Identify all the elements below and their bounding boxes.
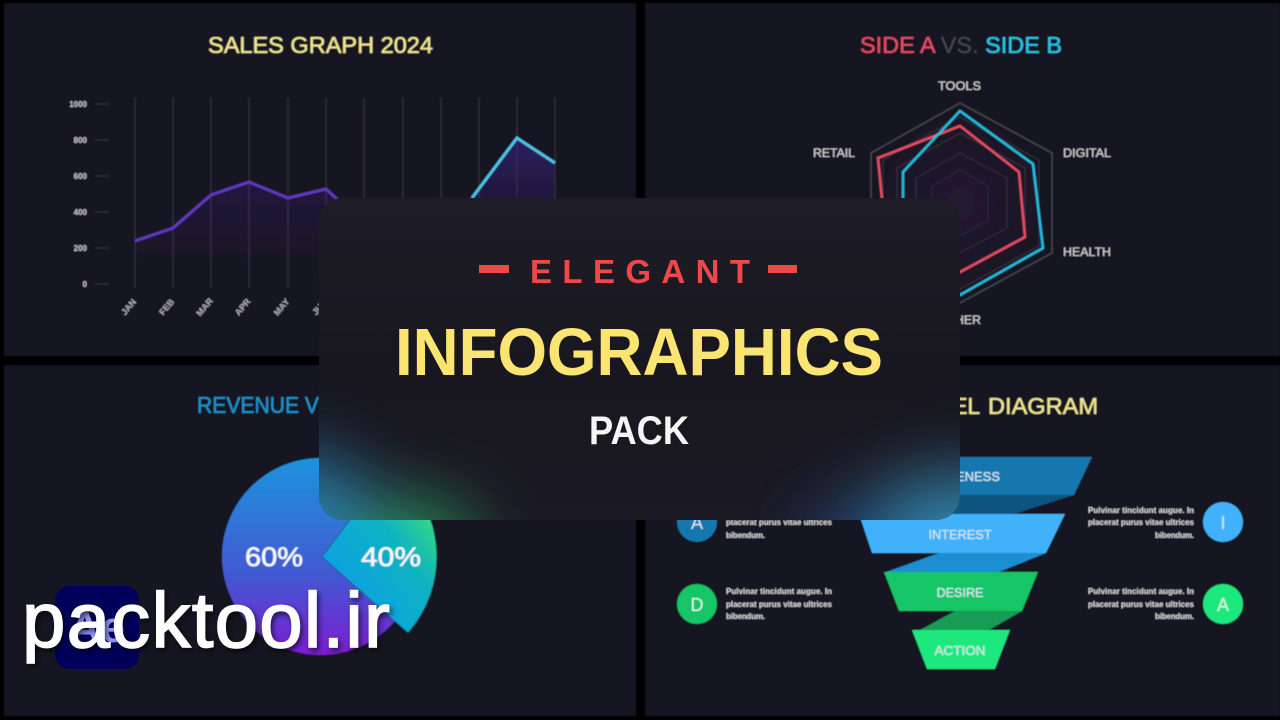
callout: D: placerat purus vitae ultrices	[726, 600, 833, 609]
line chart: FEB	[157, 297, 177, 317]
callout: D: D	[690, 595, 704, 615]
line chart: JAN	[119, 297, 138, 317]
callout: I: I	[1220, 513, 1226, 533]
heading: funnel diagram: FUNNEL	[890, 393, 980, 419]
icon: after effects badge: Ae	[69, 603, 125, 652]
callout: I	[1088, 502, 1243, 542]
line chart: JUN	[310, 297, 329, 317]
heading: revenue: REVENUE V	[197, 392, 320, 418]
line chart: 400	[74, 208, 88, 217]
pie chart	[222, 458, 437, 655]
line chart: APR	[233, 296, 253, 318]
radar chart: TOOLS	[938, 79, 981, 93]
panel: side a vs side b	[645, 3, 1280, 356]
icon: after effects badge	[55, 586, 139, 669]
line chart: 600	[74, 172, 88, 181]
callout: I: placerat purus vitae ultrices	[1088, 518, 1195, 527]
callout: I: bibendum.	[1155, 531, 1194, 540]
watermark: packtool.ir: packtool.ir	[22, 576, 390, 664]
radar chart: DIGITAL	[1063, 146, 1111, 160]
callout: D	[677, 584, 833, 624]
funnel: AWARENESS	[918, 469, 1000, 484]
callout: A left: A	[691, 513, 703, 533]
callout: A right: placerat purus vitae ultrices	[1088, 600, 1195, 609]
line chart: 0	[83, 280, 88, 289]
pie chart: 60%	[245, 542, 303, 572]
radar chart	[813, 79, 1111, 327]
pie chart: 40%	[361, 542, 421, 572]
title: infographics: INFOGRAPHICS	[395, 315, 883, 390]
callout: A left	[677, 502, 833, 542]
funnel: INTEREST	[928, 527, 992, 542]
funnel	[828, 457, 1092, 669]
callout: I: Pulvinar tincidunt augue. In	[1088, 506, 1194, 515]
panel: sales graph	[4, 3, 636, 356]
panel: revenue pie	[4, 365, 636, 716]
panel: funnel diagram	[645, 365, 1280, 716]
callout: A right: A	[1217, 595, 1229, 615]
heading: side a vs side b: SIDE A VS. SIDE B	[860, 32, 1062, 58]
radar chart: RETAIL	[813, 146, 855, 160]
funnel: ACTION	[934, 643, 986, 658]
subtitle: pack: PACK	[589, 409, 689, 453]
line chart: MAY	[272, 297, 292, 318]
callout: D: Pulvinar tincidunt augue. In	[726, 587, 832, 596]
line chart: MAR	[194, 296, 215, 318]
callout: A right: Pulvinar tincidunt augue. In	[1088, 587, 1194, 596]
callout: A left: placerat purus vitae ultrices	[726, 518, 833, 527]
eyebrow: elegant: ELEGANT	[530, 253, 750, 290]
callout: A left: Pulvinar tincidunt augue. In	[726, 506, 832, 515]
callout: A right	[1088, 584, 1243, 624]
pie wedge: 40%	[322, 465, 437, 633]
line chart: 1000	[69, 100, 88, 109]
callout: D: bibendum.	[726, 612, 765, 621]
line chart: 200	[74, 244, 88, 253]
heading: sales graph: SALES GRAPH 2024	[208, 32, 433, 58]
callout: A left: bibendum.	[726, 531, 765, 540]
radar chart: OTHER	[938, 313, 981, 327]
line chart: 800	[74, 136, 88, 145]
callout: A right: bibendum.	[1155, 612, 1194, 621]
heading: funnel diagram	[890, 393, 1098, 419]
line chart	[69, 98, 555, 318]
funnel: DESIRE	[936, 585, 984, 600]
central title card	[319, 198, 960, 520]
radar chart: HEALTH	[1063, 245, 1111, 259]
eyebrow: elegant	[479, 253, 797, 290]
heading: funnel diagram: DIAGRAM	[988, 393, 1098, 419]
